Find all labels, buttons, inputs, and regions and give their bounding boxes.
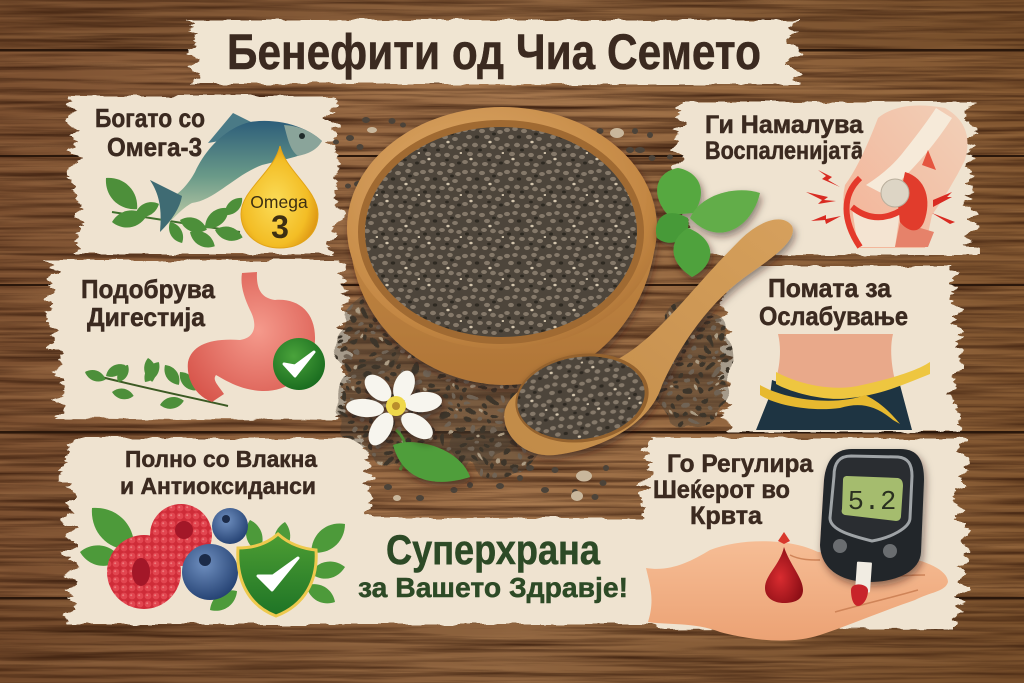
icon: omega-3 oil drop — [241, 146, 318, 248]
card: Omega-3 — [95, 103, 322, 252]
heading — [653, 450, 814, 530]
heading: Омега-3 — [107, 132, 202, 162]
slogan: Суперхрана — [386, 526, 601, 573]
icon: stomach — [188, 272, 315, 402]
heading: и Антиоксиданси — [120, 473, 316, 499]
card: weight loss — [756, 273, 930, 430]
heading: Помата за — [768, 273, 892, 303]
icon: blood drop — [765, 532, 803, 603]
card: blood sugar — [646, 449, 948, 641]
icon: glucose meter: 5.2 — [848, 488, 896, 518]
icon: shield with check — [238, 534, 316, 616]
icon: glucose meter — [820, 449, 924, 606]
heading: Ги Намалува — [705, 111, 864, 139]
pain bolts — [806, 170, 955, 224]
mint leaves — [656, 168, 760, 277]
heading: Ослабување — [759, 301, 908, 331]
icon: berries and leaves — [78, 498, 352, 616]
wooden spoon with seeds — [504, 219, 793, 455]
flower and leaf — [345, 368, 470, 482]
slogan: за Вашето Здравје! — [358, 572, 628, 603]
heading: Шеќерот во — [653, 476, 790, 504]
heading — [120, 446, 317, 499]
heading: Дигестија — [87, 302, 206, 332]
icon: omega-3 oil drop: Omega — [250, 192, 308, 212]
card: digestion — [81, 272, 325, 411]
seeds in spoon — [512, 348, 650, 448]
heading — [759, 273, 908, 331]
heading — [95, 103, 205, 162]
heading: Полно со Влакна — [125, 446, 317, 472]
herb sprig — [99, 171, 246, 252]
slogan — [358, 526, 628, 603]
herb sprig — [83, 357, 228, 411]
heading: Воспаленијата̄ — [705, 137, 864, 165]
card: fibre and antioxidants — [78, 446, 352, 616]
icon: knee — [806, 106, 968, 248]
heading — [705, 111, 864, 165]
icon: waist with tape — [756, 334, 930, 430]
heading: Подобрува — [81, 274, 215, 304]
card: inflammation — [705, 106, 968, 248]
chia bowl — [347, 107, 657, 385]
icon: check badge — [273, 338, 325, 390]
heading: Крвта — [690, 502, 763, 530]
title: Бенефити од Чиа Семето — [227, 24, 761, 80]
heading: Го Регулира — [667, 450, 814, 478]
icon: omega-3 oil drop: 3 — [271, 209, 289, 245]
heading — [81, 274, 215, 332]
seeds in bowl — [365, 127, 637, 337]
icon: hand — [646, 541, 948, 641]
heading: Богато со — [95, 103, 205, 133]
icon: fish — [150, 113, 322, 232]
scattered chia seeds — [333, 117, 732, 501]
